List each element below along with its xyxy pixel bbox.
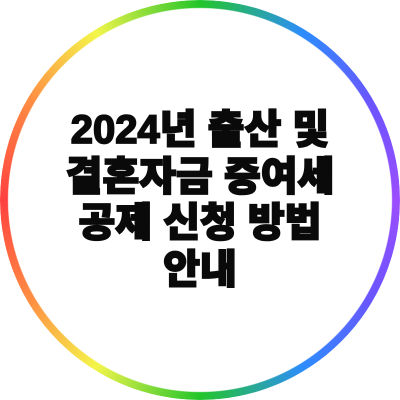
title: 안내 [163,248,237,292]
title: 2024년 출산 및 [71,108,329,152]
title: 공제 신청 방법 [78,201,322,245]
title [66,108,334,292]
title: 결혼자금 증여세 [66,154,334,198]
